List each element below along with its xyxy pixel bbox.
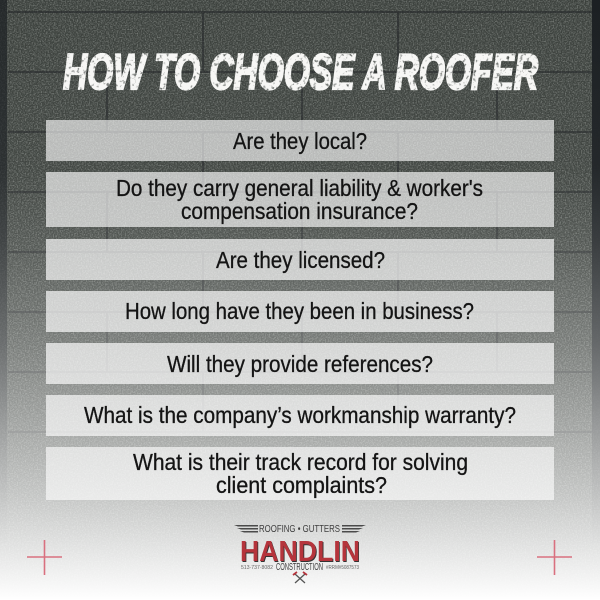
panel: workmanship warranty [46,395,554,436]
panel: years in business [46,291,554,332]
panel: insurance: Do they carry general liability & worker's [116,175,483,201]
panel: licensed [46,239,554,280]
logo: Handlin Construction [234,524,366,583]
panel: insurance [46,172,554,227]
logo tagline: ROOFING • GUTTERS [259,524,340,535]
dark roof edges [0,0,7,543]
panel: references [46,343,554,384]
icon: right crosshair [537,540,572,575]
panel: insurance: compensation insurance? [181,198,418,224]
logo wordmark: HANDLIN [241,537,361,569]
icon: left crosshair [27,540,62,575]
icon: crossed hammers [293,572,307,583]
panel: are they local [46,120,554,161]
panel: years in business: How long have they been in business? [125,298,474,324]
panel: client complaints: client complaints? [216,472,387,498]
panel: workmanship warranty: What is the company’s workmanship warranty? [84,402,516,428]
logo contact line: 513·737·8082 [241,565,273,571]
logo: Handlin Construction: #RRM#5087573 [326,565,359,571]
logo: Handlin Construction: CONSTRUCTION [276,562,323,573]
panel: client complaints [46,447,554,500]
panel: are they local: Are they local? [233,128,367,154]
panel: references: Will they provide references? [167,351,433,377]
logo wings [234,525,366,532]
logo: Handlin Construction: HANDLIN [240,536,360,568]
panel: client complaints: What is their track record for solving [133,449,468,475]
panel: licensed: Are they licensed? [216,247,385,273]
